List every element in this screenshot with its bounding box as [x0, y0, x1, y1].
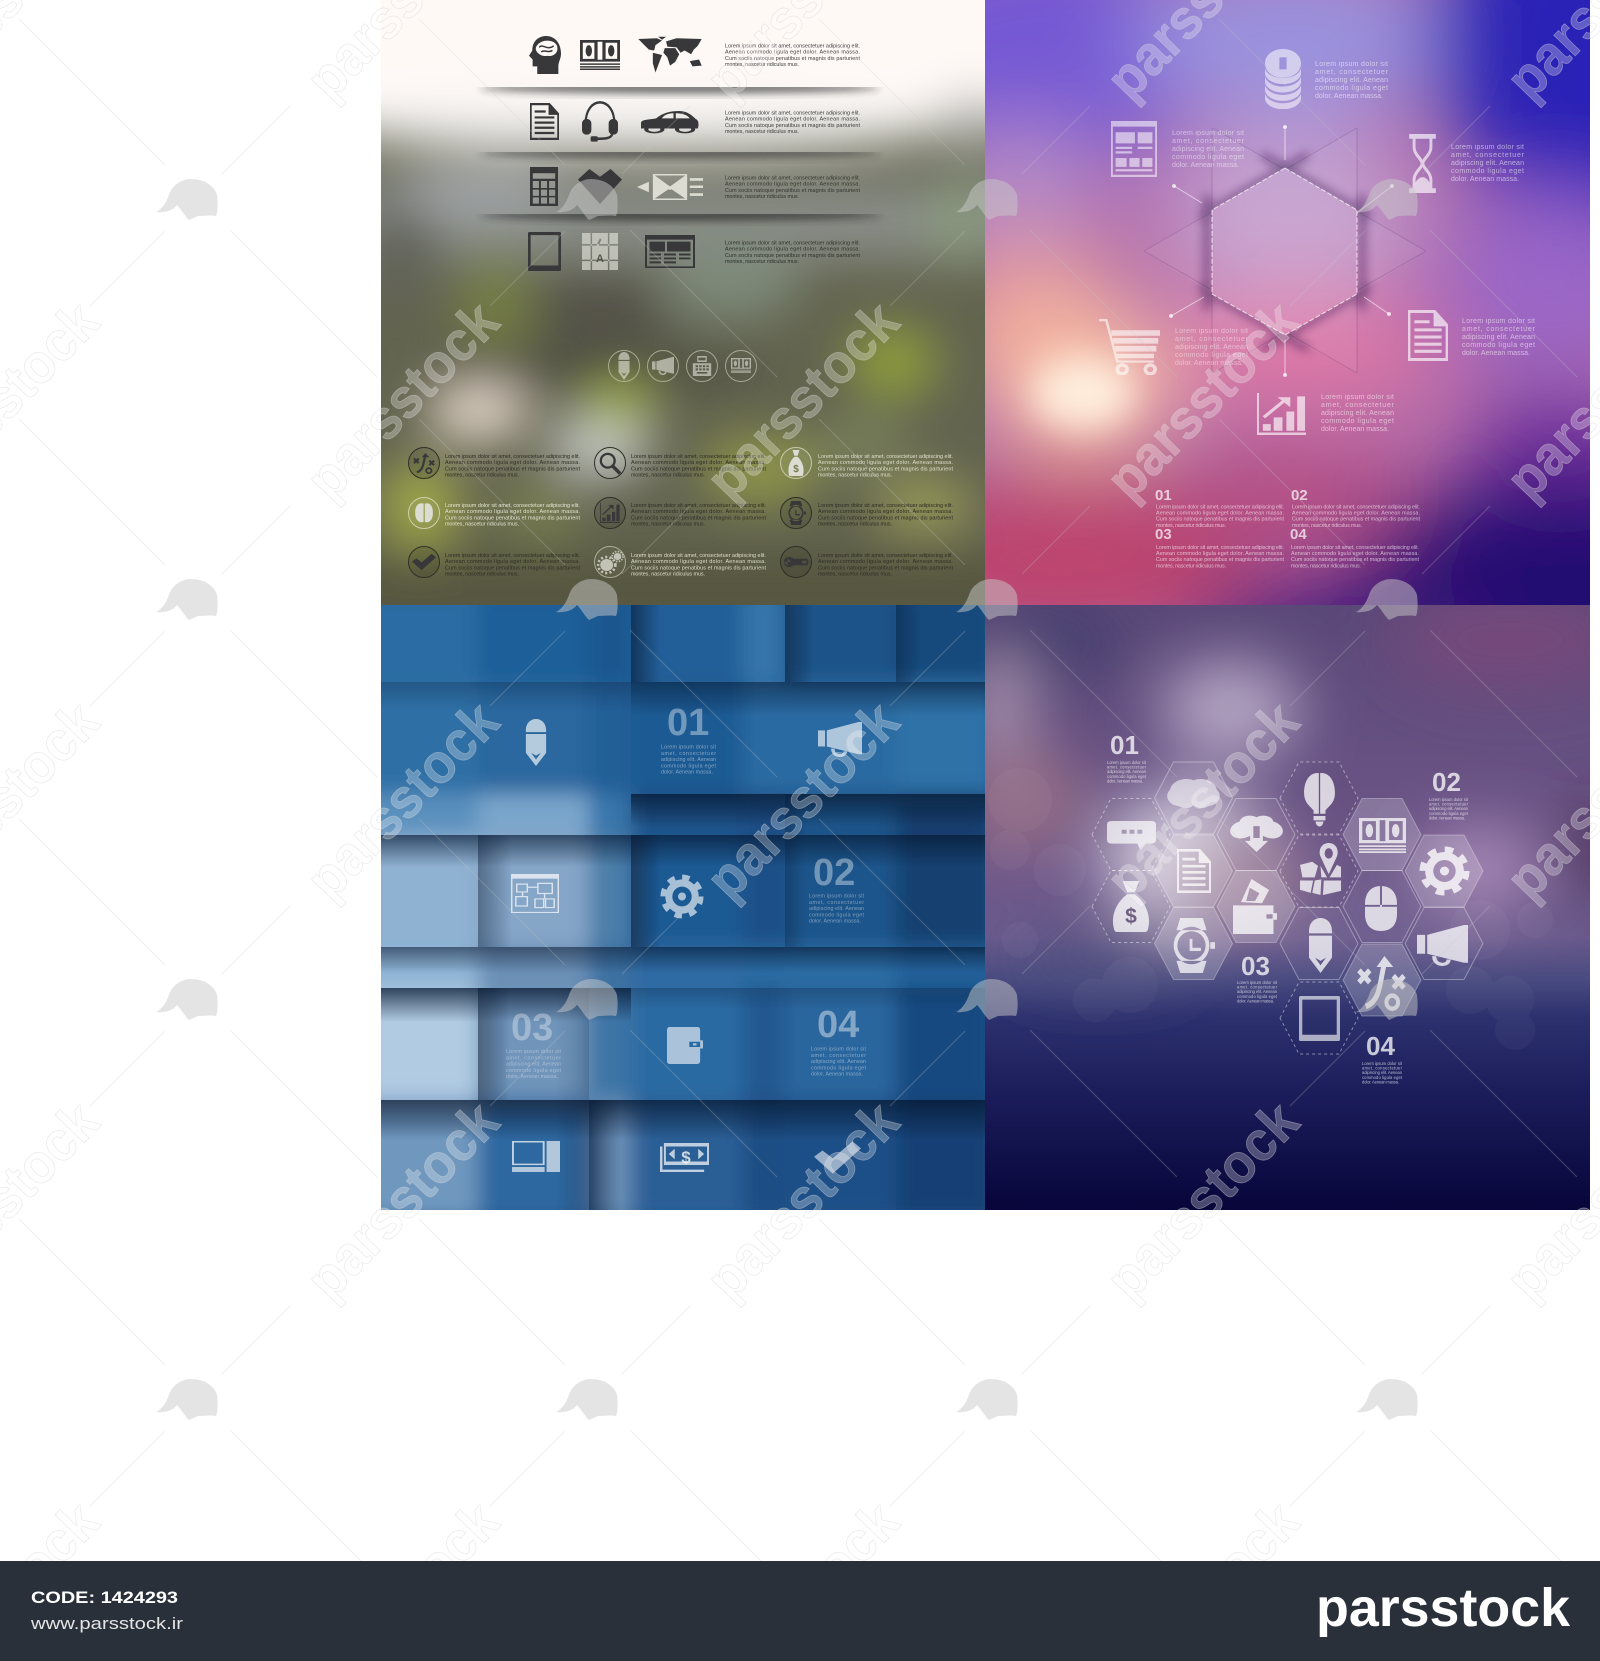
icon: wrist watch: [1174, 918, 1215, 973]
numbered text: 02: 02: [1432, 767, 1461, 797]
numbered text: 01: adipiscing elit. Aenean: [1107, 769, 1147, 774]
text: check mark: Lorem ipsum dolor sit amet, consectetuer adipiscing elit.: [445, 553, 580, 559]
text: wrench: montes, nascetur ridiculus mus.: [818, 572, 892, 578]
text: money bag: Aenean commodo ligula eget dolor. Aenean massa.: [818, 460, 953, 466]
text: report table: Lorem ipsum dolor sit: [1172, 130, 1244, 137]
numbered text: 04: adipiscing elit. Aenean: [1362, 1070, 1403, 1075]
numbered text: 04: Lorem ipsum dolor sit: [811, 1046, 867, 1052]
text: wrench: Cum sociis natoque penatibus et magnis dis parturient: [818, 565, 954, 571]
text block: row 1: montes, nascetur ridiculus mus.: [725, 62, 799, 68]
numbered text: 02: commodo ligula eget: [809, 912, 865, 918]
strip shadows: [480, 82, 880, 221]
watermark: parsstock words: parsstock: [294, 1089, 511, 1311]
watermark: parsstock words: parsstock: [694, 1089, 911, 1311]
icon: banknotes: [580, 40, 620, 70]
text: report table: dolor. Aenean massa.: [1172, 162, 1239, 169]
connector lines with dots: [1170, 126, 1394, 376]
numbered text: 03: [506, 1007, 562, 1080]
numbered text: 01: Lorem ipsum dolor sit amet, consectetuer adipiscing elit.: [1156, 504, 1284, 510]
icon: brain bulb: [1304, 773, 1335, 826]
numbered text: 02: commodo ligula eget: [1429, 811, 1469, 816]
numbered text: 04: [1362, 1031, 1403, 1084]
watermark: rhino logos: [156, 179, 1418, 1420]
numbered text: 03: commodo ligula eget: [1237, 994, 1278, 999]
text: gears: [631, 553, 766, 578]
text: growth chart: amet, consectetuer: [1321, 402, 1395, 409]
numbered text: 03: amet, consectetuer: [506, 1055, 561, 1061]
numbered text: 02: amet, consectetuer: [1429, 802, 1469, 807]
text: growth chart: adipiscing elit. Aenean: [1321, 410, 1394, 417]
text: report table: adipiscing elit. Aenean: [1172, 146, 1244, 153]
text block: row 4: montes, nascetur ridiculus mus.: [725, 259, 799, 265]
panel: blurred photo with icon rows: [381, 0, 985, 605]
icon: browser window: [645, 235, 695, 268]
numbered text: 01: montes, nascetur ridiculus mus.: [1156, 523, 1226, 529]
text: shopping cart: Lorem ipsum dolor sit: [1175, 328, 1248, 335]
numbered text: 03: Lorem ipsum dolor sit: [1237, 980, 1278, 985]
text: hourglass: dolor. Aenean massa.: [1451, 176, 1519, 183]
icon: world map: [638, 37, 702, 72]
text: strategy plan: Lorem ipsum dolor sit amet, consectetuer adipiscing elit.: [445, 454, 580, 460]
text: money bag: Cum sociis natoque penatibus et magnis dis parturient: [818, 466, 954, 472]
icon: tablet: [1299, 996, 1340, 1041]
text: watch: Aenean commodo ligula eget dolor. Aenean massa.: [818, 509, 953, 515]
numbered text: 03: 03: [1241, 951, 1270, 981]
text block: row 3: Lorem ipsum dolor sit amet, consectetuer adipiscing elit.: [725, 176, 860, 182]
numbered text: 04: 04: [1290, 526, 1307, 543]
icon: street map: A: [596, 253, 604, 265]
icon: brain download: [1230, 816, 1283, 852]
icon: hourglass: [1409, 134, 1436, 193]
text block: row 2: Lorem ipsum dolor sit amet, consectetuer adipiscing elit.: [725, 110, 860, 116]
footer bar: [0, 1561, 1600, 1661]
numbered text: 03: commodo ligula eget: [506, 1068, 562, 1074]
text: watch: [818, 503, 954, 528]
text: coin stack: Lorem ipsum dolor sit: [1315, 61, 1388, 68]
text: gears: Aenean commodo ligula eget dolor. Aenean massa.: [631, 559, 766, 565]
numbered text: 01: dolor. Aenean massa.: [661, 770, 713, 776]
icon: document: [1408, 310, 1448, 361]
text: coin stack: dolor. Aenean massa.: [1315, 93, 1383, 100]
text block: row 1: Aenean commodo ligula eget dolor. Aenean massa.: [725, 50, 860, 56]
text: strategy plan: montes, nascetur ridiculus mus.: [445, 473, 519, 479]
numbered text: 02: [1429, 767, 1469, 820]
text: report table: commodo ligula eget: [1172, 154, 1244, 161]
numbered text: 04: commodo ligula eget: [811, 1065, 867, 1071]
numbered text: 02: 02: [813, 852, 855, 894]
numbered text: 03: montes, nascetur ridiculus mus.: [1156, 563, 1226, 569]
text: shopping cart: [1175, 328, 1249, 367]
numbered text: 03: Lorem ipsum dolor sit: [506, 1049, 562, 1055]
numbered text: 02: amet, consectetuer: [809, 900, 864, 906]
numbered text: 03: Aenean commodo ligula eget dolor. Aenean massa.: [1156, 551, 1284, 557]
icon: strategy plan: [1359, 956, 1404, 1009]
text: report table: amet, consectetuer: [1172, 138, 1245, 145]
text: brain: Lorem ipsum dolor sit amet, consectetuer adipiscing elit.: [445, 503, 580, 509]
text: growth chart: [1321, 394, 1395, 433]
text: check mark: montes, nascetur ridiculus mus.: [445, 572, 519, 578]
numbered text: 04: commodo ligula eget: [1362, 1075, 1403, 1080]
numbered text: 03: dolor. Aenean massa.: [1237, 998, 1274, 1003]
numbered text: 02: Lorem ipsum dolor sit amet, consectetuer adipiscing elit.: [1292, 504, 1420, 510]
ring icon: check mark: [408, 546, 440, 578]
text: money bag: montes, nascetur ridiculus mus.: [818, 473, 892, 479]
text: shopping cart: amet, consectetuer: [1175, 336, 1249, 343]
website address: www.parsstock.ir: [30, 1614, 183, 1633]
numbered text: 04: 04: [817, 1004, 859, 1046]
numbered text: 01: Aenean commodo ligula eget dolor. Aenean massa.: [1156, 511, 1284, 517]
numbered text: 03: amet, consectetuer: [1237, 985, 1278, 990]
text: check mark: Cum sociis natoque penatibus et magnis dis parturient: [445, 565, 580, 571]
watermark: parsstock words: parsstock: [694, 289, 911, 511]
numbered text: 01: adipiscing elit. Aenean: [661, 757, 716, 763]
text block: row 1: Cum sociis natoque penatibus et magnis dis parturient: [725, 56, 860, 62]
numbered text: 01: 01: [1110, 730, 1139, 760]
numbered text: 01: Lorem ipsum dolor sit: [1107, 760, 1147, 765]
icon: tablet: [528, 232, 561, 271]
text: document: [1462, 318, 1536, 357]
text: report table: [1172, 130, 1245, 169]
text: check mark: [445, 553, 580, 578]
numbered text: 03: Lorem ipsum dolor sit amet, consectetuer adipiscing elit.: [1156, 545, 1284, 551]
text block: row 3: Aenean commodo ligula eget dolor. Aenean massa.: [725, 182, 860, 188]
icon: banknotes: [1359, 818, 1406, 853]
text: hourglass: commodo ligula eget: [1451, 168, 1524, 175]
icon: pencil: [1309, 918, 1332, 973]
text: brain: [445, 503, 580, 528]
text: shopping cart: dolor. Aenean massa.: [1175, 360, 1243, 367]
icon: car: [641, 111, 699, 133]
text: strategy plan: Cum sociis natoque penatibus et magnis dis parturient: [445, 466, 580, 472]
text block: row 4: Lorem ipsum dolor sit amet, consectetuer adipiscing elit.: [725, 240, 860, 246]
numbered text: 03: [1155, 526, 1284, 569]
numbered text: 01: [1155, 487, 1284, 529]
icon row: four ringed icons: [608, 350, 756, 382]
numbered text: 01: amet, consectetuer: [1107, 765, 1147, 770]
numbered text: 02: 02: [1291, 487, 1308, 504]
text: shopping cart: adipiscing elit. Aenean: [1175, 344, 1248, 351]
text block: row 1: Lorem ipsum dolor sit amet, consectetuer adipiscing elit.: [725, 44, 860, 50]
numbered text: 03: adipiscing elit. Aenean: [1237, 989, 1278, 994]
icon: headset: [582, 102, 618, 142]
text: watch: Cum sociis natoque penatibus et magnis dis parturient: [818, 515, 954, 521]
text block: row 2: [725, 110, 860, 135]
text: bar chart: Aenean commodo ligula eget dolor. Aenean massa.: [631, 509, 766, 515]
numbered text: 03: 03: [511, 1007, 553, 1049]
icon: megaphone: [1417, 925, 1468, 964]
ring icon: brain: [408, 498, 440, 528]
text: document: adipiscing elit. Aenean: [1462, 334, 1535, 341]
numbered text: 02: [809, 852, 865, 925]
text: magnifier: [631, 454, 766, 479]
text: watch: Lorem ipsum dolor sit amet, consectetuer adipiscing elit.: [818, 503, 953, 509]
numbered text: 04: adipiscing elit. Aenean: [811, 1059, 866, 1065]
text: shopping cart: commodo ligula eget: [1175, 352, 1248, 359]
blurred photo background: [381, 0, 985, 605]
text: money bag: [818, 454, 954, 479]
numbered text: 04: amet, consectetuer: [1362, 1066, 1403, 1071]
icon: dollar notes: $: [681, 1148, 691, 1167]
text: gears: Lorem ipsum dolor sit amet, consectetuer adipiscing elit.: [631, 553, 766, 559]
text: growth chart: Lorem ipsum dolor sit: [1321, 394, 1394, 401]
numbered text: 04: dolor. Aenean massa.: [811, 1072, 863, 1078]
numbered text: 01: [661, 702, 717, 776]
text: bar chart: Lorem ipsum dolor sit amet, consectetuer adipiscing elit.: [631, 503, 766, 509]
text: bar chart: Cum sociis natoque penatibus et magnis dis parturient: [631, 515, 766, 521]
text: check mark: Aenean commodo ligula eget dolor. Aenean massa.: [445, 559, 580, 565]
icon: megaphone: [818, 722, 862, 756]
icon: money bag: $: [1125, 905, 1137, 928]
numbered text: 02: adipiscing elit. Aenean: [809, 906, 864, 912]
numbered text: 02: Aenean commodo ligula eget dolor. Aenean massa.: [1292, 511, 1420, 517]
text: bar chart: montes, nascetur ridiculus mus.: [631, 522, 705, 528]
text: gears: Cum sociis natoque penatibus et magnis dis parturient: [631, 565, 766, 571]
text block: row 4: Aenean commodo ligula eget dolor. Aenean massa.: [725, 247, 860, 253]
numbered text: 01: dolor. Aenean massa.: [1107, 778, 1143, 783]
numbered text: 04: [811, 1004, 867, 1078]
icon: dollar notes: [660, 1143, 709, 1172]
numbered text: 01: Cum sociis natoque penatibus et magnis dis parturient: [1156, 517, 1284, 523]
text: money bag: Lorem ipsum dolor sit amet, consectetuer adipiscing elit.: [818, 454, 953, 460]
text: watch: montes, nascetur ridiculus mus.: [818, 522, 892, 528]
text: hourglass: amet, consectetuer: [1451, 152, 1525, 159]
numbered text: 04: dolor. Aenean massa.: [1362, 1079, 1399, 1084]
panel: purple bokeh with hexagon cluster: [950, 590, 1600, 1210]
text block: row 3: Cum sociis natoque penatibus et magnis dis parturient: [725, 188, 860, 194]
icon: wallet with money: [1233, 879, 1277, 934]
icon: envelope: [637, 174, 703, 200]
numbered text: 03: 03: [1155, 526, 1172, 543]
icon: brain: [1167, 779, 1220, 808]
numbered text: 01: amet, consectetuer: [661, 751, 716, 757]
numbered text: 03: Cum sociis natoque penatibus et magnis dis parturient: [1156, 557, 1284, 563]
panel: violet sunset with hexagon star: [985, 0, 1590, 605]
text block: row 2: Aenean commodo ligula eget dolor. Aenean massa.: [725, 117, 860, 123]
text: coin stack: commodo ligula eget: [1315, 85, 1388, 92]
text: document: commodo ligula eget: [1462, 342, 1535, 349]
icon: coin stack: [1265, 49, 1301, 109]
icon: gear: [664, 878, 700, 915]
text: brain: montes, nascetur ridiculus mus.: [445, 522, 519, 528]
brand logo wordmark: parsstock: [1316, 1578, 1571, 1638]
text: document: dolor. Aenean massa.: [1462, 350, 1530, 357]
icon: street map: [582, 233, 618, 270]
text: magnifier: Cum sociis natoque penatibus et magnis dis parturient: [631, 466, 766, 472]
numbered text: 04: Lorem ipsum dolor sit: [1362, 1061, 1403, 1066]
icon: report table: [1111, 121, 1157, 177]
text: coin stack: [1315, 61, 1389, 100]
numbered text: 04: montes, nascetur ridiculus mus.: [1291, 563, 1361, 569]
icon: document: [530, 103, 559, 140]
ring icon: bar chart: [594, 498, 626, 528]
numbered text: 02: Lorem ipsum dolor sit: [1429, 797, 1469, 802]
icon: calculator: [530, 167, 558, 206]
ring icon: gears: [594, 546, 626, 578]
numbered text: 01: 01: [667, 702, 709, 744]
numbered text: 01: commodo ligula eget: [1107, 774, 1147, 779]
text: growth chart: commodo ligula eget: [1321, 418, 1394, 425]
text: bar chart: [631, 503, 766, 528]
text: coin stack: amet, consectetuer: [1315, 69, 1389, 76]
blurred bokeh background: [950, 590, 1600, 1210]
image code: CODE: 1424293: [31, 1588, 178, 1607]
icon: wallet: [667, 1027, 703, 1064]
text: coin stack: adipiscing elit. Aenean: [1315, 77, 1388, 84]
numbered text: 02: Cum sociis natoque penatibus et magnis dis parturient: [1292, 517, 1420, 523]
hexagon cluster: [1092, 762, 1483, 1054]
text: wrench: [818, 553, 954, 578]
numbered text: 01: commodo ligula eget: [661, 763, 717, 769]
text: growth chart: dolor. Aenean massa.: [1321, 426, 1389, 433]
text: brain: Aenean commodo ligula eget dolor. Aenean massa.: [445, 509, 580, 515]
ring icon: wrench: [780, 546, 812, 578]
icon: cog wheel: [1423, 850, 1466, 892]
watermark: parsstock words: parsstock: [1094, 1089, 1311, 1311]
watermark: parsstock words: parsstock: [1094, 689, 1311, 911]
watermark: parsstock words: parsstock: [1094, 289, 1311, 511]
numbered text: 04: Cum sociis natoque penatibus et magnis dis parturient: [1291, 557, 1420, 563]
numbered text: 02: Lorem ipsum dolor sit: [809, 894, 865, 900]
icon: computer mouse: [1365, 886, 1397, 931]
text: brain: Cum sociis natoque penatibus et magnis dis parturient: [445, 515, 580, 521]
text block: row 3: [725, 176, 860, 200]
bokeh circles: [988, 768, 1553, 1050]
woven colour cells: [360, 590, 996, 1220]
text: magnifier: Lorem ipsum dolor sit amet, consectetuer adipiscing elit.: [631, 454, 766, 460]
numbered text: 02: montes, nascetur ridiculus mus.: [1292, 523, 1362, 529]
numbered text: 02: dolor. Aenean massa.: [1429, 815, 1465, 820]
text: wrench: Lorem ipsum dolor sit amet, consectetuer adipiscing elit.: [818, 553, 953, 559]
numbered text: 04: [1290, 526, 1420, 569]
text: document: Lorem ipsum dolor sit: [1462, 318, 1535, 325]
numbered text: 01: [1107, 730, 1147, 783]
watermark: parsstock words: parsstock: [294, 689, 511, 911]
text block: row 2: montes, nascetur ridiculus mus.: [725, 129, 799, 135]
numbered text: 02: [1291, 487, 1420, 529]
icon: speech bubble: [1107, 821, 1156, 850]
text block: row 4: Cum sociis natoque penatibus et magnis dis parturient: [725, 253, 860, 259]
grid: icons with text: [408, 448, 954, 578]
ring icon: strategy plan: [408, 448, 440, 478]
numbered text: 03: [1237, 951, 1278, 1003]
hexagram folded star: [1144, 128, 1426, 373]
text: gears: montes, nascetur ridiculus mus.: [631, 572, 705, 578]
numbered text: 02: adipiscing elit. Aenean: [1429, 806, 1469, 811]
icon: document: [1177, 849, 1211, 893]
ring icon: magnifier: [594, 448, 626, 478]
fold shadows: [381, 605, 985, 1210]
text block: row 3: montes, nascetur ridiculus mus.: [725, 194, 799, 200]
text: magnifier: montes, nascetur ridiculus mus.: [631, 473, 705, 479]
ring icon: money bag: $: [793, 464, 799, 475]
icon: desktop computer: [512, 1141, 560, 1172]
blurred gradient background: [870, 0, 1600, 710]
icon: map with pin: [1300, 843, 1341, 895]
numbered text: 03: adipiscing elit. Aenean: [506, 1062, 561, 1068]
ring icon: watch: [780, 498, 812, 528]
text block: row 4: [725, 240, 860, 265]
text block: row 2: Cum sociis natoque penatibus et magnis dis parturient: [725, 123, 860, 129]
text: magnifier: Aenean commodo ligula eget dolor. Aenean massa.: [631, 460, 766, 466]
icon: flowchart window: [511, 874, 559, 913]
watermark: parsstock words: parsstock: [294, 289, 511, 511]
numbered text: 04: amet, consectetuer: [811, 1053, 866, 1059]
text: strategy plan: Aenean commodo ligula eget dolor. Aenean massa.: [445, 460, 580, 466]
numbered text: 01: Lorem ipsum dolor sit: [661, 744, 717, 750]
ring icon: money bag: [780, 448, 812, 478]
text: wrench: Aenean commodo ligula eget dolor. Aenean massa.: [818, 559, 953, 565]
text: hourglass: Lorem ipsum dolor sit: [1451, 144, 1524, 151]
panel: blue woven grid: [360, 590, 996, 1220]
icon: money bag: [1113, 881, 1149, 932]
icon: pencil: [526, 719, 546, 766]
numbered text: 03: dolor. Aenean massa.: [506, 1074, 558, 1080]
numbered text: 02: dolor. Aenean massa.: [809, 919, 861, 925]
text: hourglass: adipiscing elit. Aenean: [1451, 160, 1524, 167]
numbered text: 04: 04: [1366, 1031, 1395, 1061]
numbered text: 04: Lorem ipsum dolor sit amet, consectetuer adipiscing elit.: [1291, 545, 1419, 551]
text block: row 1: [725, 44, 860, 68]
icon: growth chart: [1257, 393, 1306, 435]
numbered text: 01: 01: [1155, 487, 1172, 504]
numbered text: 04: Aenean commodo ligula eget dolor. Aenean massa.: [1291, 551, 1419, 557]
icon: shopping cart: [1099, 320, 1160, 374]
text: document: amet, consectetuer: [1462, 326, 1536, 333]
watermark: parsstock words: parsstock: [694, 689, 911, 911]
text: strategy plan: [445, 454, 580, 479]
text: hourglass: [1451, 144, 1525, 183]
icon: handshake: [578, 169, 622, 204]
icon: check mark: [814, 1141, 861, 1174]
icon: head with brain: [529, 36, 561, 74]
